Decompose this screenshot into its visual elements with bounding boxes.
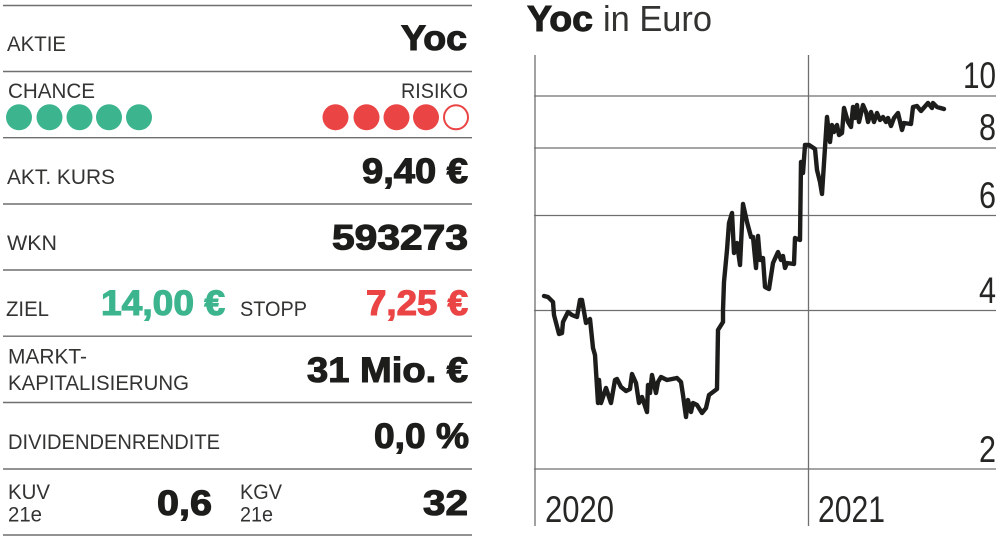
row: WKN: 593273 [332,218,468,258]
row: target and stop: ZIEL [6,297,49,321]
row: market capitalisation: KAPITALISIERUNG [8,371,189,395]
line chart: Yoc share price in euro [534,55,996,530]
row: KUV and KGV: 0,6 [157,484,212,523]
y axis labels: 6 [979,175,996,216]
icon: four red risk dots and one empty [322,104,468,130]
x axis labels: 2020 [545,489,614,530]
row: target and stop: 14,00 € [101,284,225,323]
x axis labels [545,489,885,530]
heading: chart title [527,0,712,39]
row: KUV and KGV: 21e [8,502,42,526]
row: target and stop: STOPP [240,297,307,321]
row: market capitalisation: 31 Mio. € [307,351,468,390]
row: WKN: WKN [7,231,57,255]
y axis labels [963,55,996,470]
price line [544,103,944,417]
row: chance and risk ratings [6,79,468,130]
row: KUV and KGV [8,480,468,526]
y axis labels: 8 [979,107,996,148]
y axis labels: 4 [979,270,996,311]
row: KUV and KGV: 21e [240,502,273,526]
row: current price [7,152,468,191]
row: WKN [7,218,468,258]
row: dividend yield [8,417,469,456]
row: chance and risk ratings: CHANCE [8,79,95,103]
row: KUV and KGV: KUV [8,480,51,504]
row: KUV and KGV: 32 [423,484,468,523]
row: dividend yield: 0,0 % [374,417,469,456]
row: target and stop [6,284,468,323]
row: current price: AKT. KURS [7,165,115,189]
row: stock name [7,19,467,58]
x axis labels: 2021 [818,489,885,530]
row: stock name: Yoc [401,19,467,58]
y axis labels: 2 [979,429,996,470]
row: target and stop: 7,25 € [366,284,468,323]
row: market capitalisation [8,344,468,395]
panel: stock data table [3,6,472,535]
row: stock name: AKTIE [7,32,66,56]
icon: five green chance dots [6,104,152,130]
row: KUV and KGV: KGV [240,480,283,504]
row: current price: 9,40 € [362,152,468,191]
row: chance and risk ratings: RISIKO [401,79,468,103]
row: market capitalisation: MARKT- [8,344,87,368]
row: dividend yield: DIVIDENDENRENDITE [8,430,220,454]
